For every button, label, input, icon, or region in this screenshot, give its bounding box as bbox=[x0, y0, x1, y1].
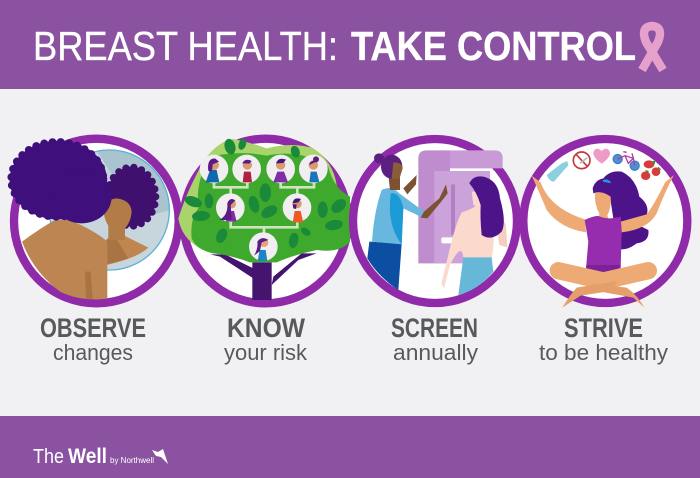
panel: observe bbox=[10, 139, 179, 303]
label: know your risk: your risk bbox=[224, 340, 308, 365]
portrait: father bbox=[283, 193, 311, 222]
icon: strawberries bbox=[641, 160, 662, 180]
logo: The Well by Northwell: The bbox=[33, 446, 64, 468]
label: strive to be healthy: to be healthy bbox=[539, 340, 668, 365]
icon: mirror bbox=[49, 149, 170, 271]
logo: The Well by Northwell: by Northwell bbox=[110, 456, 154, 465]
label: strive to be healthy bbox=[539, 313, 668, 365]
mirror reflection bbox=[103, 167, 156, 265]
logo: The Well by Northwell: Well bbox=[68, 445, 107, 468]
label: screen annually: annually bbox=[393, 340, 478, 365]
label: observe changes: OBSERVE bbox=[40, 313, 146, 343]
logo: The Well by Northwell bbox=[33, 445, 168, 468]
icon: bicycle bbox=[613, 152, 639, 170]
label: know your risk bbox=[224, 313, 308, 365]
label: observe changes bbox=[40, 313, 146, 365]
figure: patient bbox=[441, 176, 507, 295]
label: observe changes: changes bbox=[53, 340, 133, 365]
icon: mammogram machine bbox=[418, 150, 503, 263]
portrait: daughter bbox=[249, 232, 278, 261]
portrait: mother bbox=[216, 193, 245, 222]
footer band bbox=[0, 416, 700, 478]
title: TAKE CONTROL bbox=[351, 23, 636, 69]
panel: screen bbox=[353, 139, 517, 303]
icon: water bottle bbox=[547, 161, 568, 182]
icon: no smoking bbox=[573, 152, 590, 169]
portrait: grandmother 2 bbox=[299, 155, 328, 183]
panel: strive bbox=[523, 139, 687, 308]
portrait: grandfather 2 bbox=[266, 155, 295, 183]
label: screen annually: SCREEN bbox=[391, 313, 478, 343]
icon: heart bbox=[593, 149, 610, 164]
icon: tree crown bbox=[178, 139, 350, 262]
leaves bbox=[183, 138, 349, 249]
icon: pink ribbon bbox=[642, 26, 663, 70]
header band bbox=[0, 0, 700, 89]
label: screen annually bbox=[391, 313, 478, 365]
figure: technician bbox=[367, 153, 448, 290]
figure: woman meditating bbox=[532, 171, 674, 308]
portrait: grandmother 1 bbox=[200, 155, 228, 183]
icon: tree trunk bbox=[210, 253, 317, 300]
family tree connectors bbox=[214, 182, 314, 235]
title: BREAST HEALTH: bbox=[33, 23, 338, 69]
figure: woman from behind bbox=[10, 141, 112, 299]
panel: know bbox=[178, 138, 350, 303]
label: know your risk: KNOW bbox=[227, 313, 305, 343]
label: strive to be healthy: STRIVE bbox=[564, 313, 643, 343]
portrait: grandfather 1 bbox=[232, 155, 261, 183]
